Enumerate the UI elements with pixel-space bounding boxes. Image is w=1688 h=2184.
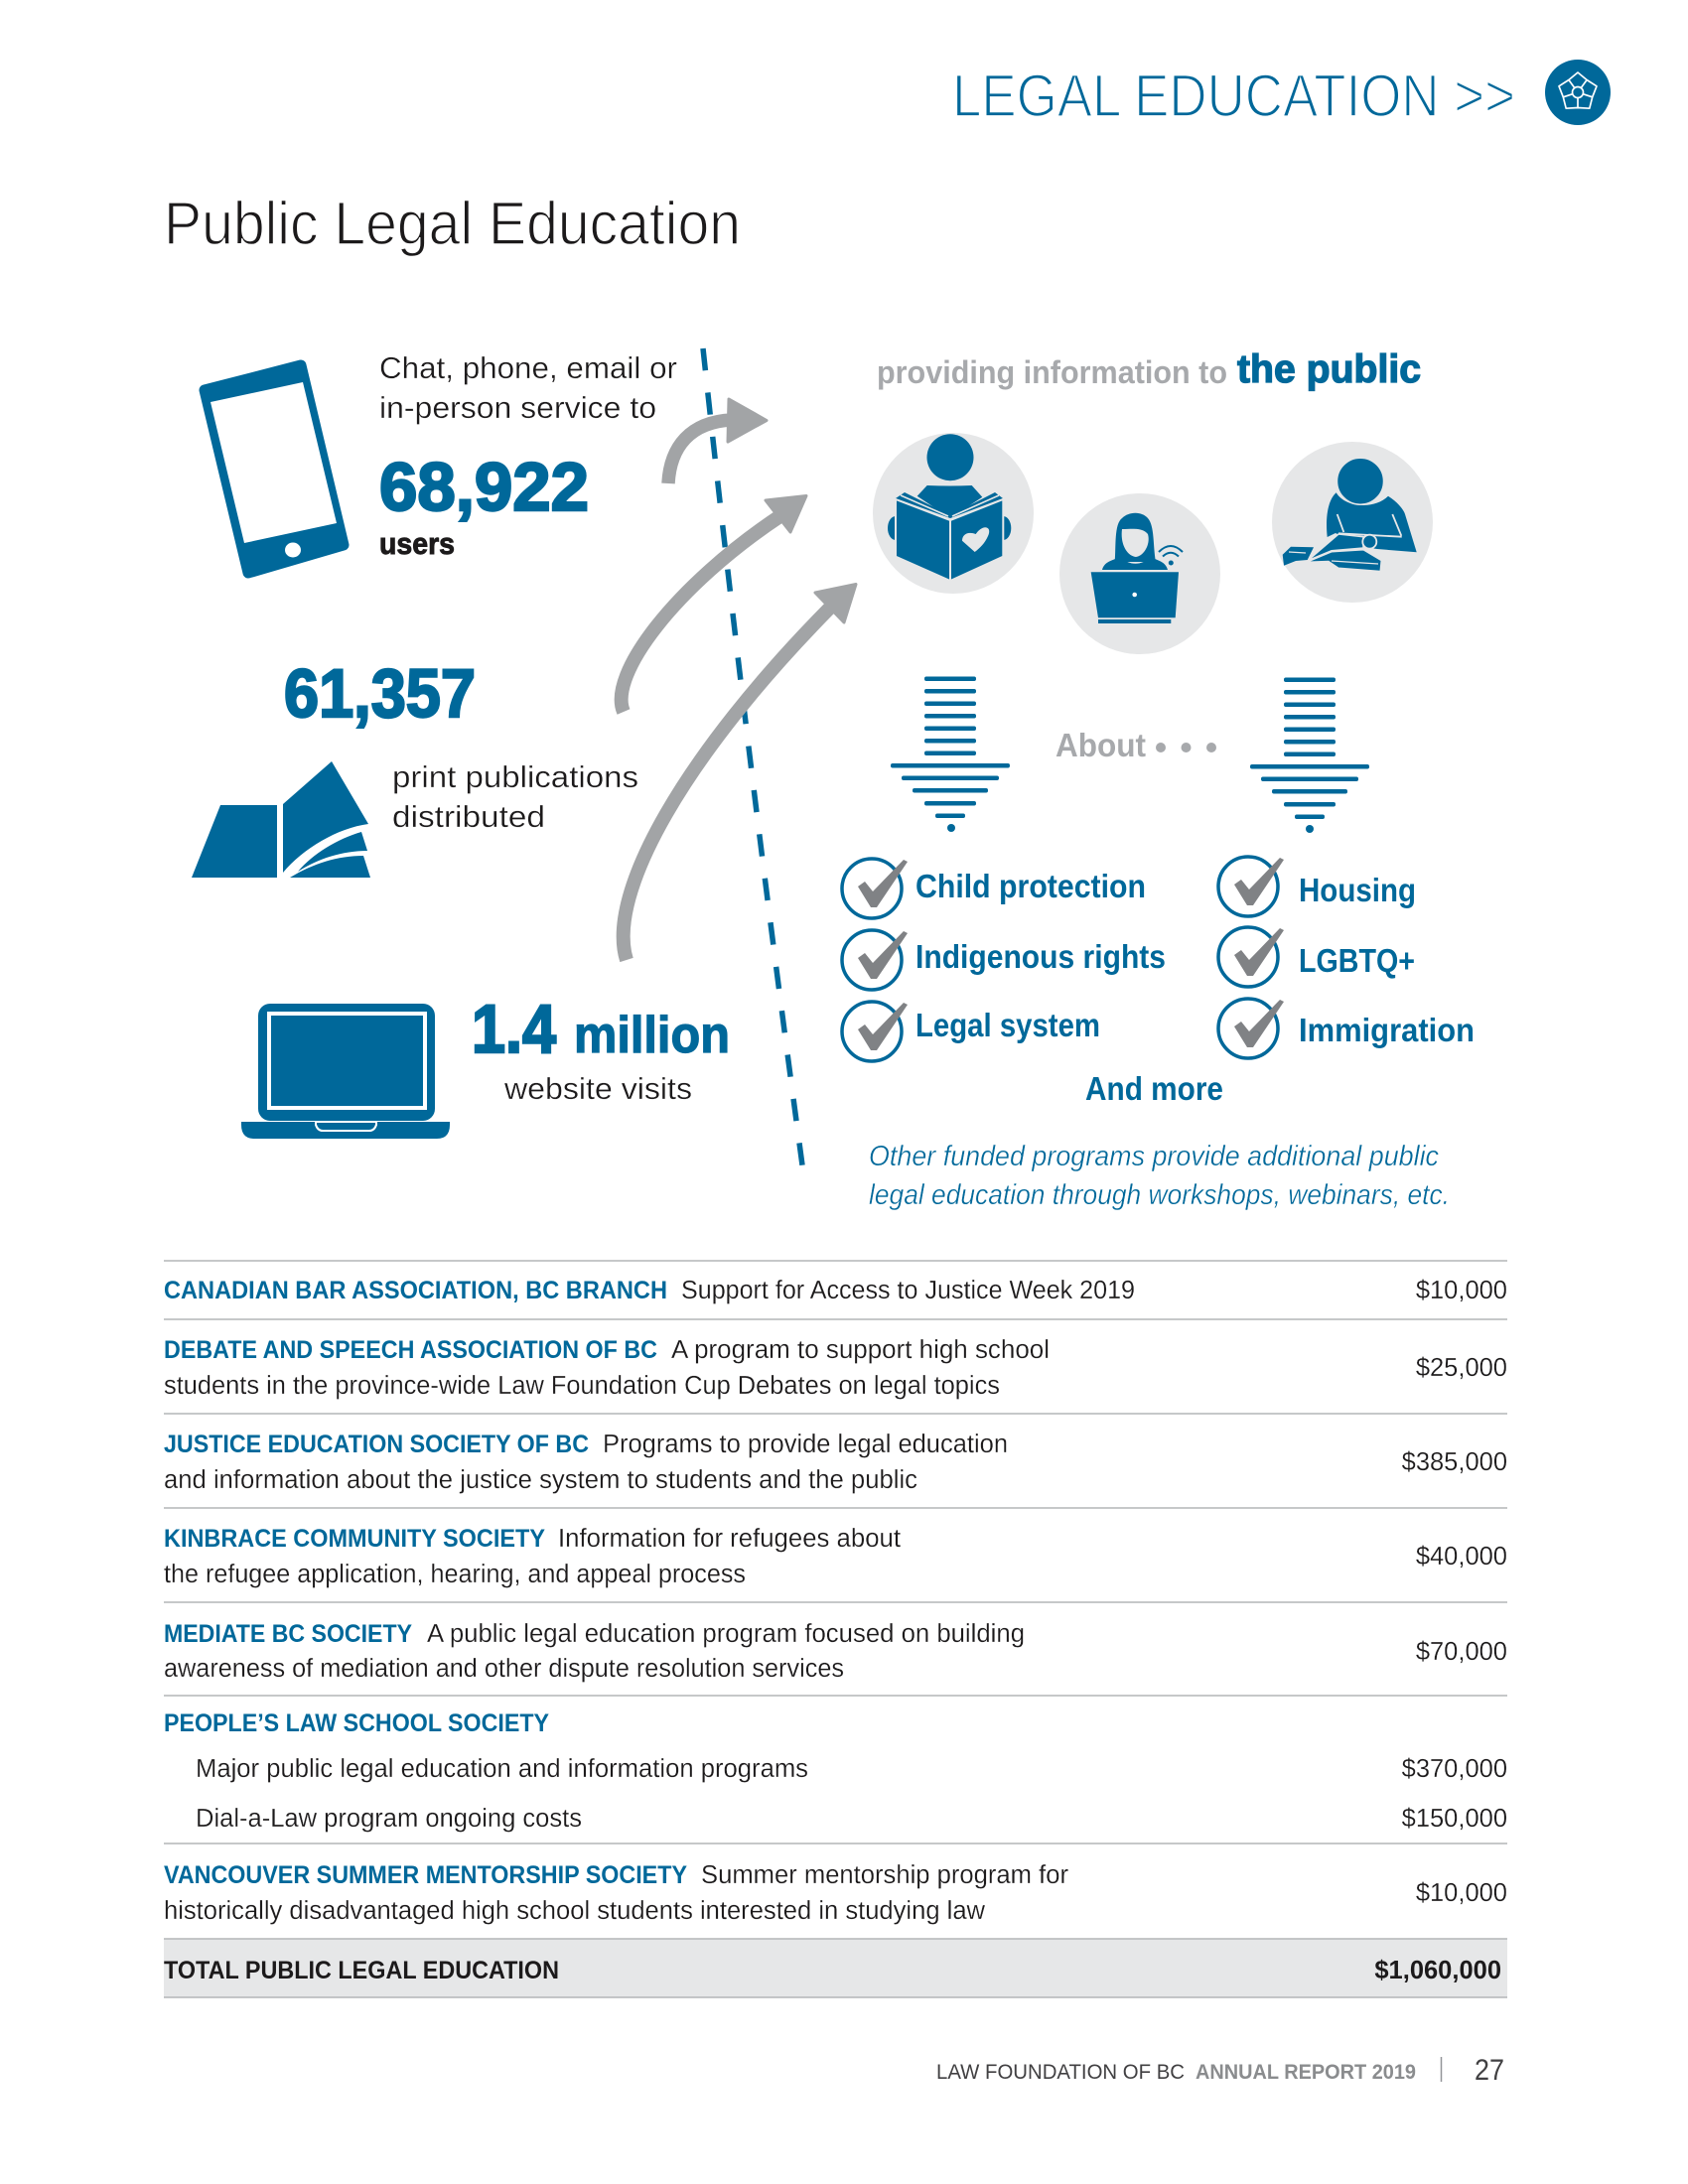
note: other funded programs: legal education through workshops, webinars, etc.: [869, 1179, 1450, 1211]
icon: open book: [192, 761, 370, 878]
row: kinbrace: Information for refugees about: [558, 1525, 901, 1553]
row: canadian bar association: $10,000: [1416, 1277, 1507, 1304]
icon: person studying: [1272, 442, 1433, 603]
row: kinbrace: KINBRACE COMMUNITY SOCIETY: [164, 1525, 545, 1553]
arrow: striped down right: [1250, 677, 1369, 833]
item: immigration: [1218, 999, 1475, 1058]
arrow: publications to public: [622, 496, 806, 712]
item: legal system: Legal system: [915, 1007, 1100, 1043]
row: debate and speech: students in the province-wide Law Foundation Cup Debates on legal topics: [164, 1372, 1000, 1400]
note: other funded programs: [869, 1141, 1450, 1211]
item: lgbtq+: LGBTQ+: [1299, 942, 1415, 979]
topic checklist: [842, 857, 1475, 1107]
row: vancouver summer mentorship: $10,000: [1416, 1879, 1507, 1907]
row: people's law school: Dial-a-Law program ongoing costs: [196, 1805, 582, 1833]
item: housing: [1218, 857, 1416, 916]
row: canadian bar association: CANADIAN BAR ASSOCIATION, BC BRANCH: [164, 1277, 667, 1304]
row: mediate bc: MEDIATE BC SOCIETY: [164, 1620, 412, 1648]
title: Public Legal Education: [164, 190, 741, 257]
stat: website visits: [241, 991, 730, 1139]
arrow: striped down left: [891, 677, 1010, 832]
note: other funded programs: Other funded programs provide additional public: [869, 1141, 1439, 1172]
stat: service users: Chat, phone, email or: [379, 350, 677, 385]
row: vancouver summer mentorship: historically disadvantaged high school students interested in studying law: [164, 1897, 986, 1925]
heading: providing information: the public: [1237, 347, 1421, 391]
icon: person reading book: [873, 433, 1034, 594]
stat: service users: 68,922: [379, 449, 589, 525]
row: debate and speech: DEBATE AND SPEECH ASSOCIATION OF BC: [164, 1336, 657, 1364]
row: people's law school: Major public legal education and information programs: [196, 1755, 808, 1783]
grants table: [164, 1261, 1507, 1997]
dashed divider: [703, 348, 803, 1172]
item: and more: And more: [1085, 1070, 1223, 1107]
row: canadian bar association: Support for Access to Justice Week 2019: [681, 1277, 1135, 1304]
stat: service users: [205, 350, 677, 573]
row: mediate bc: $70,000: [1416, 1638, 1507, 1666]
row: debate and speech: [164, 1336, 1507, 1400]
row: debate and speech: A program to support high school: [671, 1336, 1050, 1364]
row: kinbrace: $40,000: [1416, 1543, 1507, 1570]
row: total: [164, 1939, 1507, 1997]
stat: print publications: 61,357: [284, 655, 476, 732]
stat: print publications: print publications: [392, 759, 638, 794]
footer: LAW FOUNDATION OF BC: [936, 2061, 1185, 2084]
label: about: About: [1055, 727, 1146, 763]
row: justice education: [164, 1431, 1507, 1494]
item: housing: Housing: [1299, 872, 1416, 908]
stat: website visits: million: [574, 1007, 730, 1064]
row: people's law school: $150,000: [1402, 1805, 1507, 1833]
stat: service users: users: [379, 526, 455, 561]
arrow: chat to public: [668, 399, 767, 483]
item: child protection: [842, 859, 1146, 918]
label: about: [1055, 727, 1216, 763]
footer: ANNUAL REPORT 2019: [1196, 2061, 1416, 2084]
row: justice education: Programs to provide legal education: [603, 1431, 1008, 1458]
row: canadian bar association: [164, 1277, 1507, 1304]
row: people's law school: PEOPLE’S LAW SCHOOL SOCIETY: [164, 1709, 549, 1737]
row: total: TOTAL PUBLIC LEGAL EDUCATION: [164, 1957, 559, 1984]
heading: providing information: providing information to: [877, 354, 1227, 390]
stat: website visits: 1.4: [472, 991, 556, 1067]
item: indigenous rights: Indigenous rights: [915, 938, 1166, 975]
icon: flower badge: [1545, 60, 1611, 125]
row: mediate bc: awareness of mediation and other dispute resolution services: [164, 1655, 844, 1683]
section header: LEGAL EDUCATION >>: [952, 63, 1515, 129]
row: people's law school: [164, 1709, 1507, 1833]
stat: service users: in-person service to: [379, 390, 656, 425]
icon: laptop: [241, 1004, 450, 1139]
stat: website visits: website visits: [503, 1071, 692, 1106]
footer: [936, 2054, 1504, 2087]
row: kinbrace: the refugee application, hearing, and appeal process: [164, 1561, 746, 1588]
row: vancouver summer mentorship: VANCOUVER SUMMER MENTORSHIP SOCIETY: [164, 1861, 687, 1889]
arrow: website to public: [624, 584, 856, 960]
row: mediate bc: [164, 1620, 1507, 1683]
stat: print publications: [192, 655, 638, 878]
item: child protection: Child protection: [915, 868, 1146, 904]
row: vancouver summer mentorship: [164, 1861, 1507, 1925]
row: debate and speech: $25,000: [1416, 1354, 1507, 1382]
row: kinbrace: [164, 1525, 1507, 1588]
heading: providing information: [877, 347, 1421, 391]
row: mediate bc: A public legal education program focused on building: [427, 1620, 1025, 1648]
row: people's law school: $370,000: [1402, 1755, 1507, 1783]
item: legal system: [842, 1002, 1100, 1061]
row: justice education: $385,000: [1402, 1448, 1507, 1476]
row: justice education: and information about the justice system to students and the public: [164, 1466, 917, 1494]
row: justice education: JUSTICE EDUCATION SOCIETY OF BC: [164, 1431, 589, 1458]
stat: print publications: distributed: [392, 799, 545, 834]
item: lgbtq+: [1218, 927, 1415, 987]
icon: smartphone: [205, 365, 344, 573]
footer: 27: [1475, 2054, 1504, 2087]
item: indigenous rights: [842, 930, 1166, 990]
item: immigration: Immigration: [1299, 1012, 1475, 1048]
row: vancouver summer mentorship: Summer mentorship program for: [701, 1861, 1068, 1889]
row: total: $1,060,000: [1374, 1957, 1501, 1984]
icon: woman at laptop: [1059, 493, 1220, 654]
